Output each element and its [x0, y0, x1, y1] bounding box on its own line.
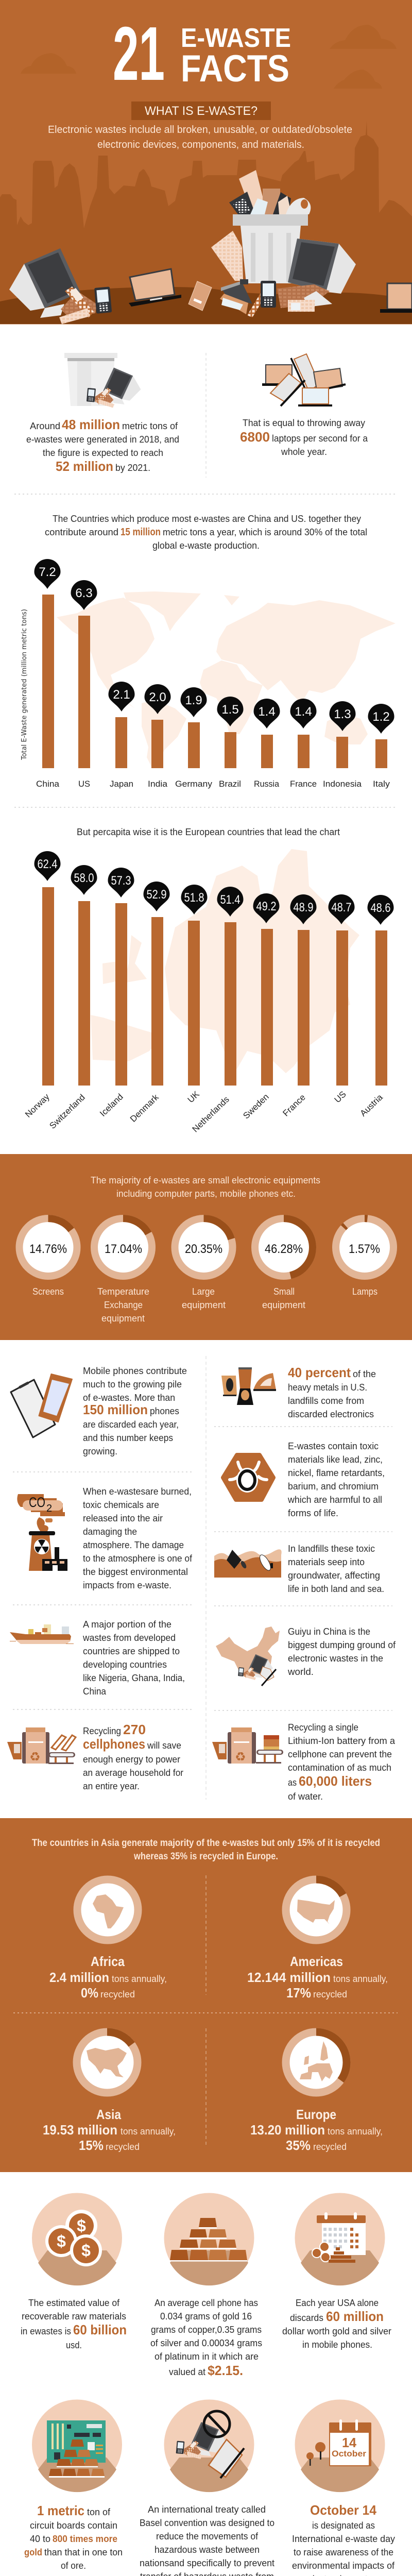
text: 48 million to 52 million: e-wastes were generated in 2018, and [26, 434, 179, 445]
value pins: 2.0 [149, 690, 166, 704]
text block [82, 1619, 185, 1697]
fact: international e-waste day [292, 2400, 395, 2576]
rotated country labels: Switzerland [47, 1092, 87, 1131]
text: composition intro: The majority of e-wastes are small electronic equipments [91, 1175, 320, 1185]
rotated country labels: Iceland [98, 1092, 125, 1118]
value pins: 1.2 [372, 710, 390, 724]
text: 48 million to 52 million [26, 417, 179, 474]
text: 6800 laptops: That is equal to throwing away [243, 418, 365, 428]
text block: Recycling [83, 1726, 121, 1736]
text block: October 14 [310, 2502, 377, 2518]
rotated country labels [23, 1089, 385, 1134]
country labels: Brazil [219, 779, 241, 789]
value pins: 48.7 [332, 901, 351, 914]
text: top producing countries: contribute around [45, 527, 118, 537]
icon: recycling machine with battery: ♻ [235, 1750, 246, 1764]
region: americas: tons annually, [333, 1974, 388, 1984]
text block: Basel convention was designed to [140, 2518, 274, 2528]
title: E-WASTE [181, 23, 291, 53]
fact: guiyu china [216, 1626, 396, 1686]
text block: usd. [66, 2340, 82, 2350]
country labels: US [78, 779, 90, 789]
bars [42, 595, 387, 768]
text block: forms of life. [288, 1508, 338, 1518]
panel: e-waste totals left [26, 353, 179, 474]
chart: total e-waste by country [21, 559, 396, 789]
heading: what is e-waste: WHAT IS E-WASTE? [145, 104, 258, 118]
region: europe: Europe [296, 2107, 336, 2122]
text block: Lithium-Ion battery from a [288, 1736, 396, 1746]
text block [288, 1544, 384, 1594]
region: africa: Africa [91, 1954, 125, 1969]
value pins: 1.4 [258, 705, 276, 719]
text block: of silver and 0.00034 grams [150, 2338, 262, 2348]
icon: factory with co2 cloud: CO [29, 1495, 45, 1510]
text: top producing countries: metric tons a year, which is around 30% of the total [163, 527, 367, 537]
icon: trash can with e-waste [64, 353, 141, 408]
text block: International e-waste day [292, 2534, 395, 2544]
value pins: 48.9 [294, 901, 313, 914]
donut: screens: 14.76% [29, 1242, 67, 1256]
donut: temperature exchange equipment: Temperature [97, 1286, 149, 1297]
text block: 0.034 grams of gold 16 [160, 2311, 252, 2321]
donut: temperature exchange equipment: Exchange [104, 1300, 143, 1310]
fact: metals in a cell phone [150, 2193, 262, 2378]
text: 48 million to 52 million: 52 million [56, 459, 113, 474]
icon: factory with co2 cloud: 2 [46, 1503, 52, 1514]
text block: reduce the movements of [156, 2531, 259, 2541]
text: composition intro: including computer parts, mobile phones etc. [116, 1189, 296, 1199]
text block: cellphone can prevent the [288, 1749, 392, 1759]
text: 6800 laptops: whole year. [281, 447, 327, 457]
icon: coins: $ [77, 2216, 86, 2235]
value pins: 51.8 [184, 891, 204, 905]
text block: contamination of as much [288, 1762, 391, 1773]
illustration: right e-waste pile [220, 279, 332, 317]
icon: coins: $ [57, 2232, 66, 2250]
rotated country labels: Norway [23, 1092, 52, 1120]
text block [83, 1486, 193, 1590]
region: asia: Asia [96, 2107, 121, 2122]
illustration: left e-waste pile [9, 248, 112, 324]
text block: countries are shipped to [83, 1646, 180, 1656]
value pins: 57.3 [111, 874, 131, 888]
icon: circuit board with gold [32, 2400, 122, 2492]
region: europe: tons annually, [328, 2126, 383, 2137]
icon: coins [32, 2193, 122, 2285]
fact: toxic materials [223, 1441, 385, 1518]
text block [292, 2502, 395, 2576]
text block [83, 1722, 183, 1791]
text block: in mobile phones. [302, 2340, 372, 2350]
country labels [36, 779, 390, 789]
value pins: 1.9 [185, 693, 202, 707]
city skyline [0, 121, 412, 325]
icon: calendar with coins and gold [295, 2193, 385, 2285]
region: europe [250, 2032, 383, 2153]
icon: banned e-waste [164, 2400, 254, 2492]
value pins: 7.2 [39, 565, 56, 579]
text block: biggest dumping ground of [288, 1640, 396, 1650]
text block: and this number keeps [83, 1433, 173, 1443]
rotated country labels: Sweden [241, 1092, 271, 1121]
text block: grams of copper,0.35 grams [151, 2325, 262, 2335]
text block: than that in one ton [44, 2547, 123, 2557]
donut: temperature exchange equipment: 17.04% [105, 1242, 142, 1256]
text: composition intro [91, 1175, 320, 1199]
country labels: France [290, 779, 317, 789]
illustration: tablet [188, 281, 212, 311]
donut: small equipment [255, 1218, 313, 1310]
icon: factory with co2 cloud [17, 1494, 67, 1571]
chart: e-waste per capita [23, 849, 393, 1134]
illustration: laptop [129, 269, 181, 307]
rotated country labels: Denmark [128, 1092, 161, 1124]
icon: recycling machine with phones [7, 1727, 76, 1764]
rotated country labels: Austria [358, 1092, 385, 1118]
text: top producing countries [45, 514, 367, 551]
region: asia [43, 2032, 176, 2153]
text block: materials like lead, zinc, [288, 1454, 383, 1465]
text block: An average cell phone has [154, 2298, 258, 2308]
text block: Guiyu in China is the [288, 1626, 370, 1637]
text block: Each year USA alone [296, 2298, 379, 2308]
region: africa [49, 1879, 167, 2001]
icon: two smartphones [11, 1374, 72, 1437]
world map background [57, 591, 396, 768]
fact: recycling cellphones [7, 1722, 183, 1791]
text block: 60 million [326, 2309, 384, 2324]
text block: the biggest environmental [83, 1567, 188, 1577]
text block [288, 1722, 396, 1802]
text block: of the [353, 1369, 376, 1379]
icon: pile of laptops [262, 354, 346, 406]
region: asia: 15% [79, 2138, 104, 2153]
text block: electronic wastes in the [288, 1653, 383, 1664]
text block [287, 1441, 385, 1518]
text block: cellphones [83, 1736, 145, 1752]
value pins: 1.4 [295, 705, 312, 719]
text block: will save [147, 1740, 181, 1751]
heading: asia vs europe [32, 1838, 380, 1862]
text block: groundwater, affecting [288, 1570, 380, 1581]
panel: laptops per second right [240, 354, 368, 457]
text block: 40 to [30, 2534, 50, 2544]
text block: materials seep into [288, 1557, 365, 1567]
text block [24, 2503, 123, 2571]
rotated country labels: France [281, 1092, 307, 1118]
text block: gold [24, 2547, 42, 2557]
value pins: 6.3 [75, 586, 93, 600]
text: 48 million to 52 million: the figure is expected to reach [43, 448, 163, 458]
region: americas: Americas [290, 1954, 343, 1969]
text block: landfills come from [288, 1396, 364, 1406]
text block: discards [290, 2313, 323, 2323]
text block: of platinum in it which are [154, 2351, 259, 2362]
text block: hazardous waste between [154, 2545, 260, 2555]
value pins: 58.0 [74, 871, 94, 885]
text block: developing countries [83, 1659, 167, 1670]
text block: to the atmosphere is one of [83, 1553, 193, 1564]
text block: Mobile phones contribute [83, 1366, 187, 1376]
text: 48 million to 52 million: Around [30, 421, 60, 431]
text: 6800 laptops: laptops per second for a [272, 433, 368, 444]
text block: An international treaty called [148, 2504, 266, 2515]
text block: 40 percent [288, 1365, 351, 1380]
donut: large equipment: 20.35% [185, 1242, 222, 1256]
country labels: Germany [175, 779, 213, 789]
fact: mobile phones [11, 1366, 187, 1456]
donut: lamps: Lamps [352, 1286, 377, 1297]
text block: In landfills these toxic [288, 1544, 375, 1554]
panel: regional recycling [0, 1818, 412, 2172]
text block: like Nigeria, Ghana, India, [83, 1673, 185, 1683]
text: top producing countries: 15 million [121, 527, 161, 538]
text block: toxic chemicals are [83, 1500, 159, 1510]
text block: of water. [288, 1791, 323, 1802]
value pins: 62.4 [37, 857, 58, 871]
text block: of ore. [61, 2561, 86, 2571]
title: FACTS [181, 48, 289, 90]
text: 48 million to 52 million: by 2021. [115, 463, 150, 473]
text: per capita intro: But percapita wise it is the European countries that lead the chart [77, 827, 340, 837]
text block: of e-wastes. More than [83, 1393, 175, 1403]
text block: 800 times more [53, 2534, 117, 2544]
text block: 60 billion [73, 2322, 127, 2337]
text block: much to the growing pile [83, 1379, 182, 1389]
panel: hero header [0, 0, 412, 325]
text block [287, 1626, 396, 1677]
country labels: Indonesia [323, 779, 362, 789]
region: europe: recycled [313, 2142, 347, 2152]
text block [288, 1365, 376, 1419]
donut: small equipment: equipment [262, 1300, 305, 1310]
text block: enough energy to power [83, 1754, 180, 1765]
text block: atmosphere. The damage [83, 1540, 184, 1550]
icon: recycling machine with phones: ♻ [29, 1750, 41, 1764]
country labels: India [148, 779, 168, 789]
text block [282, 2298, 391, 2350]
rotated country labels: UK [186, 1089, 201, 1105]
icon: recycling machine with battery [212, 1727, 283, 1764]
donut: large equipment: Large [192, 1286, 215, 1297]
donut: screens: Screens [32, 1286, 64, 1297]
text block: in ewastes is [21, 2326, 71, 2336]
value pins: 2.1 [113, 688, 130, 702]
text block: discarded electronics [288, 1409, 374, 1419]
text block: environmental impacts of [292, 2561, 395, 2571]
fact: landfill groundwater [214, 1544, 384, 1594]
illustration: trash can [211, 170, 356, 294]
country labels: Japan [110, 779, 133, 789]
text block: damaging the [83, 1527, 137, 1537]
text: 6800 laptops [240, 418, 368, 457]
donut: temperature exchange equipment [94, 1218, 152, 1324]
text block: China [83, 1686, 107, 1697]
fact: recoverable raw materials value [21, 2193, 127, 2350]
region: asia: recycled [106, 2142, 140, 2152]
donut: large equipment: equipment [182, 1300, 226, 1310]
fact: burning releases chemicals [17, 1486, 193, 1590]
country labels: Russia [254, 779, 280, 789]
region: europe: 13.20 million [250, 2122, 325, 2138]
text block: circuit boards contain [30, 2520, 117, 2531]
intro text [48, 124, 352, 150]
text block: $2.15. [208, 2363, 243, 2378]
text block: impacts from e-waste. [83, 1580, 171, 1590]
text block: an entire year. [83, 1781, 140, 1791]
text block: 150 million [83, 1402, 148, 1417]
text block: which are harmful to all [287, 1495, 382, 1505]
icon: 14 october calendar: October [332, 2449, 366, 2459]
donut: lamps [336, 1218, 393, 1297]
text block: are discarded each year, [83, 1419, 179, 1430]
country labels: Italy [373, 779, 390, 789]
region: africa: tons annually, [112, 1974, 167, 1984]
text block: ton of [87, 2507, 111, 2517]
title: 21 [113, 11, 165, 96]
text block: growing. [83, 1446, 117, 1456]
text block: When e-wastesare burned, [83, 1486, 192, 1497]
fact: shipped to developing countries [10, 1619, 185, 1697]
icon: gold bars [164, 2193, 254, 2285]
intro text: Electronic wastes include all broken, unusable, or outdated/obsolete [48, 124, 352, 135]
text: top producing countries: The Countries which produce most e-wastes are China and US. together they [53, 514, 361, 524]
value pins: 1.3 [334, 707, 351, 721]
icon: container ship [10, 1624, 74, 1644]
country labels: China [36, 779, 60, 789]
value pins: 1.5 [221, 703, 239, 717]
text block [150, 2298, 262, 2378]
text block: as [288, 1777, 297, 1788]
title [113, 11, 291, 96]
value pins: 51.4 [220, 893, 240, 907]
value pins [34, 559, 394, 734]
heading: what is e-waste [131, 101, 271, 120]
text: 6800 laptops: 6800 [240, 429, 270, 445]
fact: basel convention [140, 2400, 274, 2576]
text block: nationsand specifically to prevent [140, 2558, 274, 2568]
text block: 270 [123, 1722, 146, 1737]
region: americas: 12.144 million [247, 1970, 331, 1985]
region: americas: recycled [313, 1989, 347, 1999]
region: asia: 19.53 million [43, 2122, 117, 2138]
panel: e-waste composition [0, 1154, 412, 1340]
value pins: 52.9 [146, 888, 167, 902]
fact: lithium-ion battery [212, 1722, 396, 1802]
text block: 60,000 liters [299, 1773, 372, 1789]
heading: asia vs europe: whereas 35% is recycled in Europe. [133, 1851, 278, 1862]
region: africa: recycled [100, 1989, 135, 1999]
icon: 14 october calendar: 14 [342, 2435, 357, 2450]
text block [140, 2504, 274, 2576]
bars [42, 887, 387, 1086]
fact: heavy metals [221, 1365, 376, 1419]
donut: lamps: 1.57% [349, 1242, 380, 1256]
axis label: Total E-Waste generated (million metric tons) [21, 609, 28, 760]
donut: small equipment: Small [273, 1286, 295, 1297]
icon: coins: $ [81, 2241, 91, 2260]
icon: contaminated soil [214, 1549, 282, 1578]
text block: Recycling a single [288, 1722, 358, 1733]
text block: an average household for [83, 1768, 183, 1778]
text block: to raise awareness of the [294, 2547, 393, 2557]
text block: world. [287, 1667, 314, 1677]
value pins: 48.6 [371, 901, 390, 915]
icon: kitchen appliances [221, 1367, 276, 1405]
region: americas [247, 1879, 388, 2001]
illustration: right edge laptop [380, 283, 412, 313]
region: asia: tons annually, [121, 2126, 176, 2137]
donut: temperature exchange equipment: equipment [101, 1313, 145, 1324]
text: 48 million to 52 million: 48 million [62, 417, 120, 432]
text block: E-wastes contain toxic [288, 1441, 379, 1451]
icon: biohazard hexagon [223, 1455, 273, 1500]
region: europe: 35% [286, 2138, 311, 2153]
text block: life in both land and sea. [288, 1584, 384, 1594]
text block: A major portion of the [83, 1619, 171, 1630]
value pins: 49.2 [256, 900, 276, 913]
text block: dollar worth gold and silver [282, 2326, 391, 2336]
decorative clouds [21, 25, 397, 89]
text block: released into the air [83, 1513, 163, 1523]
text block: heavy metals in U.S. [288, 1382, 367, 1393]
rotated country labels: US [333, 1089, 348, 1105]
text block: valued at [169, 2367, 205, 2377]
region: africa: 2.4 million [49, 1970, 109, 1985]
donut: screens [20, 1218, 77, 1297]
value pins [34, 851, 393, 925]
icon: 14 october calendar [295, 2400, 385, 2492]
text block: phones [150, 1406, 179, 1416]
region: africa: 0% [81, 1985, 98, 2001]
ground [0, 287, 412, 325]
text block: wastes from developed [82, 1633, 176, 1643]
donut: small equipment: 46.28% [265, 1242, 303, 1256]
fact: circuit board gold [24, 2400, 123, 2571]
icon: china map with e-waste [216, 1626, 280, 1686]
text block: recoverable raw materials [22, 2311, 126, 2321]
text block: is designated as [312, 2520, 375, 2531]
text block [83, 1366, 187, 1456]
region: americas: 17% [286, 1985, 311, 2001]
text block: nickel, flame retardants, [288, 1468, 385, 1478]
text block: barium, and chromium [288, 1481, 379, 1492]
fact: usa discards gold and silver [282, 2193, 391, 2350]
text block: The estimated value of [28, 2298, 120, 2308]
europe map background [91, 849, 359, 1073]
text: top producing countries: global e-waste production. [152, 540, 260, 551]
intro text: electronic devices, components, and materials. [97, 139, 304, 150]
text: 48 million to 52 million: metric tons of [122, 421, 178, 431]
text block [21, 2298, 127, 2350]
rotated country labels: Netherlands [191, 1094, 231, 1134]
text block: 1 metric [37, 2503, 84, 2518]
donut: large equipment [175, 1218, 233, 1310]
